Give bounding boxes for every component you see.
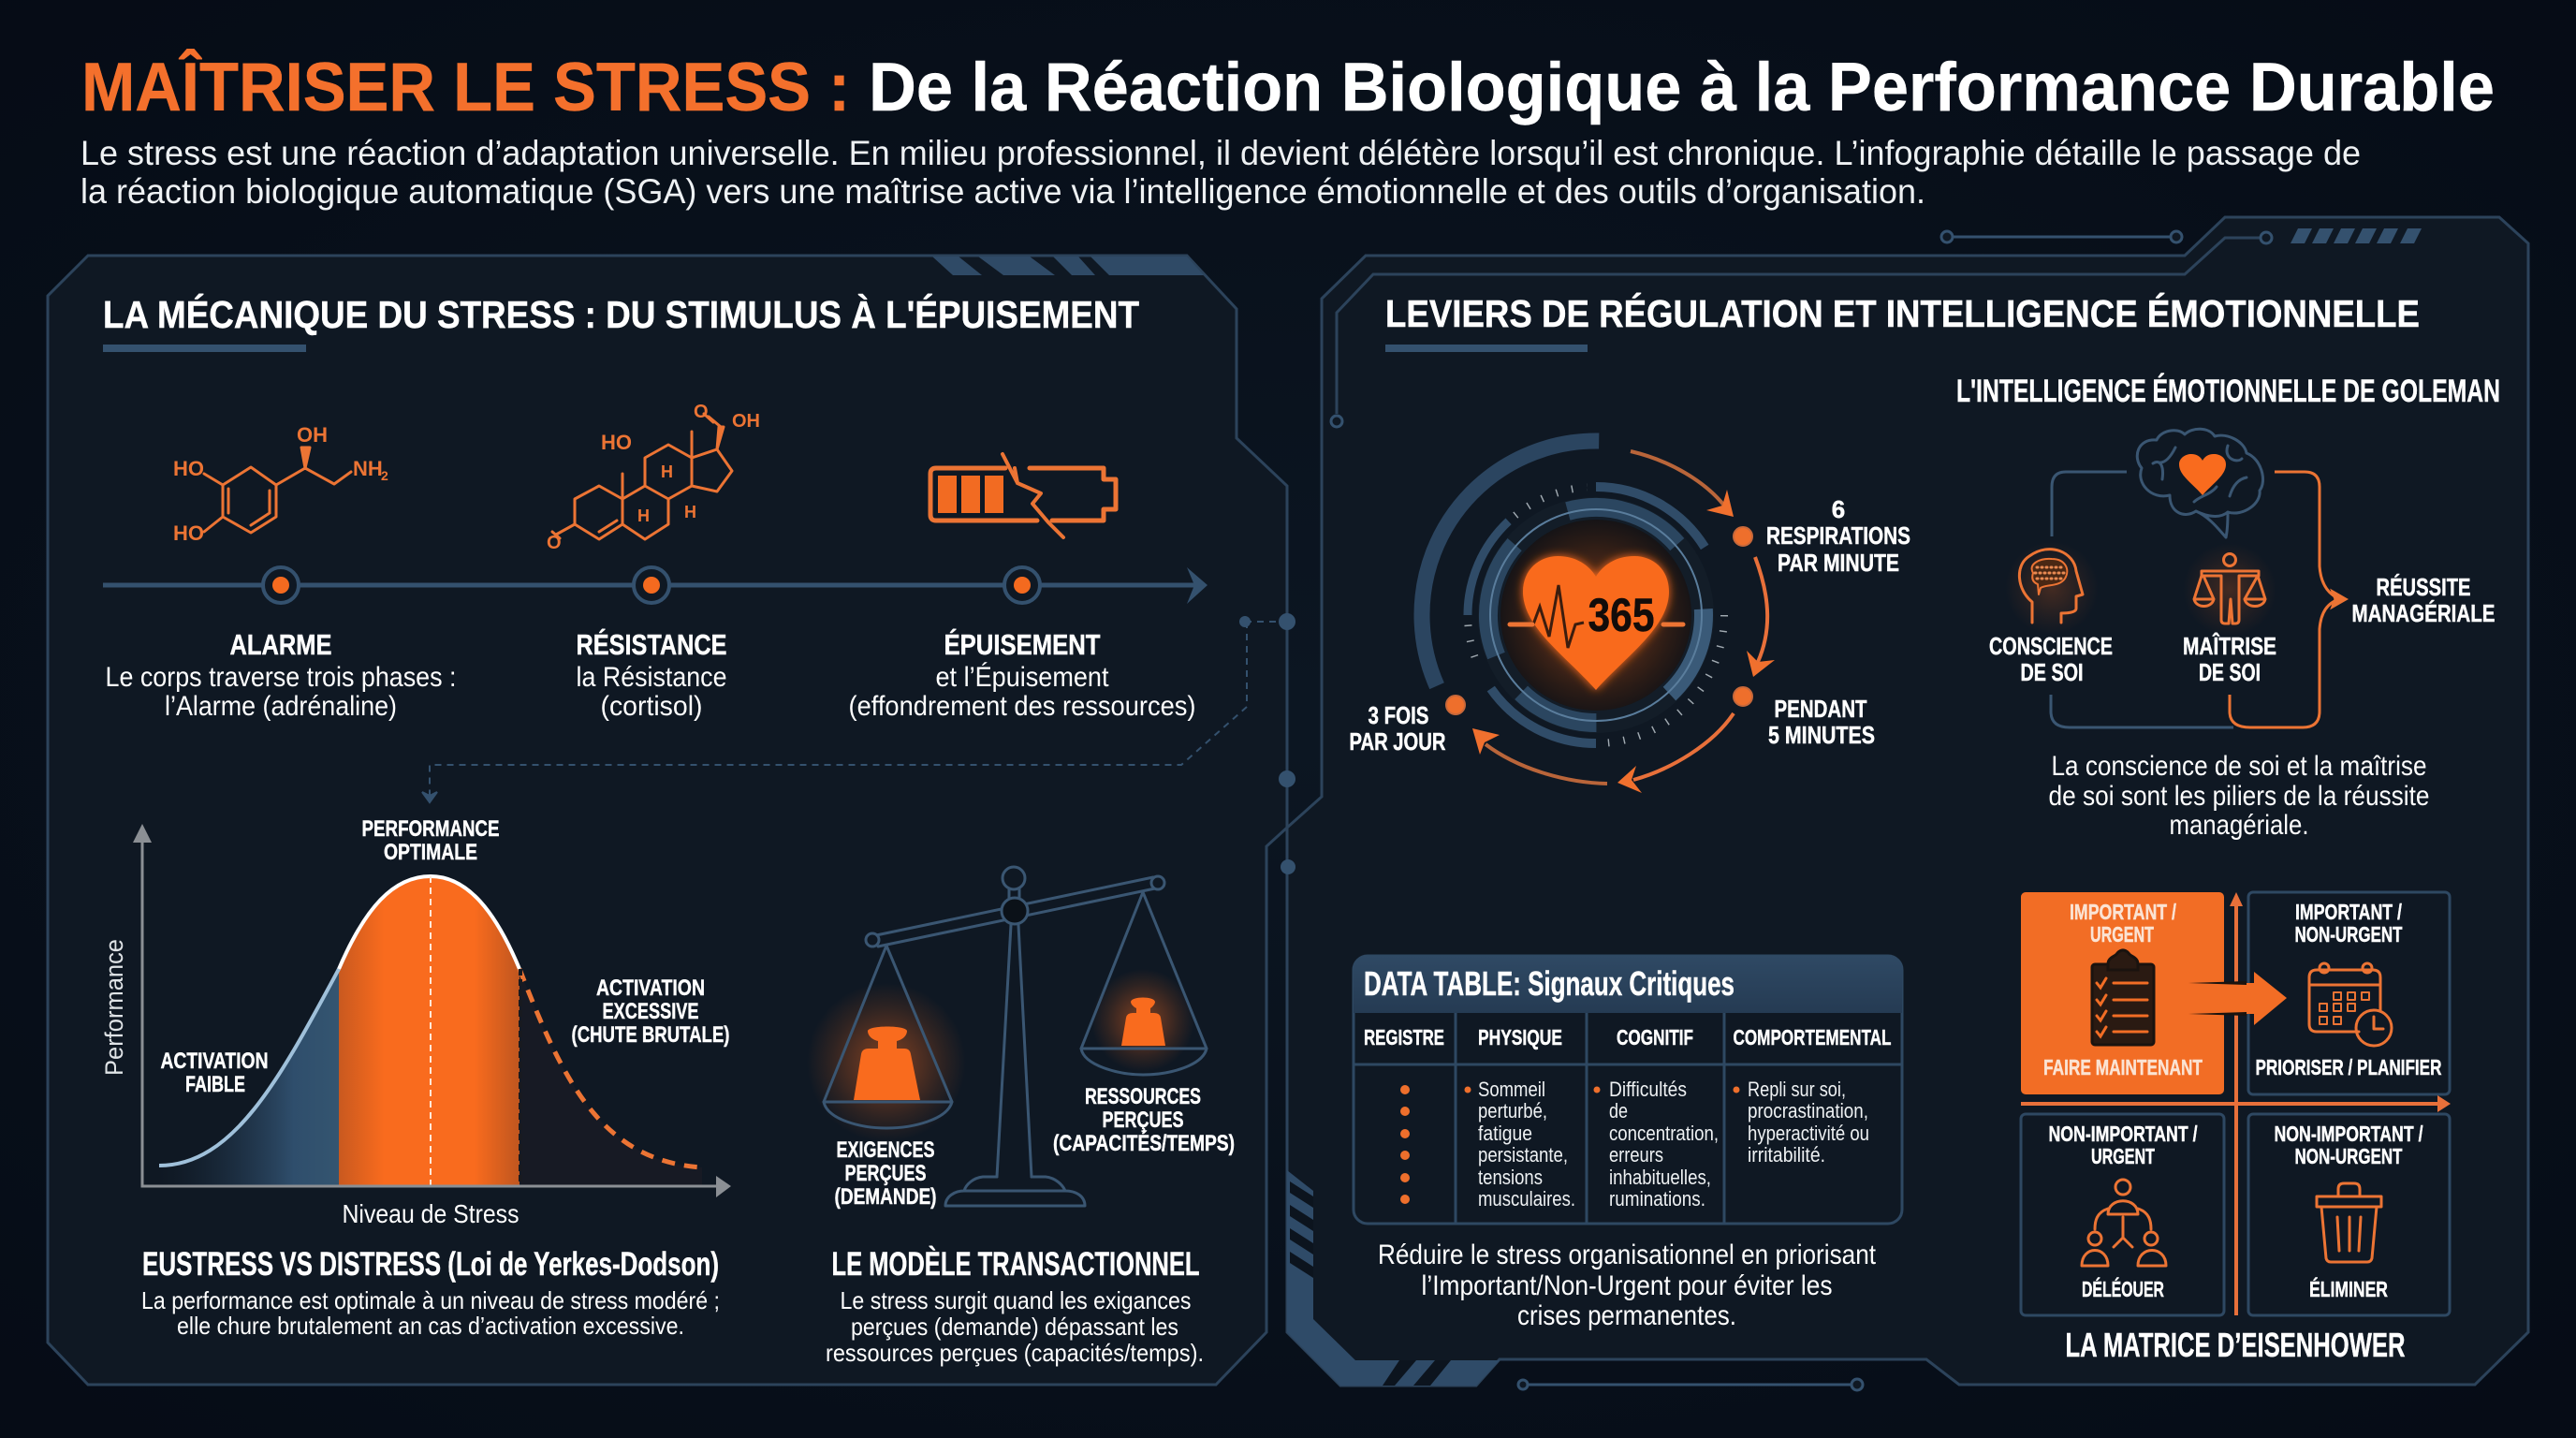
quadrant: éliminer: ÉLIMINER — [2309, 1276, 2388, 1301]
text: eustress vs distress: elle chure brutalement an cas d’activation excessive. — [177, 1312, 684, 1340]
table cell: comportemental: procrastination, — [1748, 1099, 1868, 1123]
quadrant: faire maintenant — [2021, 892, 2224, 1094]
quadrant: éliminer — [2248, 1114, 2450, 1315]
icon: cortisol molecule: OH — [732, 411, 760, 432]
cycle arrows — [1486, 451, 1767, 784]
label: 3 fois par jour: 3 FOIS — [1368, 701, 1428, 729]
label: performance optimale: OPTIMALE — [384, 840, 477, 865]
icon: balance scale — [807, 867, 1207, 1206]
quadrant: faire maintenant: URGENT — [2090, 922, 2154, 946]
text: résistance — [577, 628, 726, 722]
table cell: physique: musculaires. — [1478, 1187, 1575, 1211]
quadrant: prioriser planifier: IMPORTANT / — [2295, 900, 2402, 924]
label: activation excessive: EXCESSIVE — [603, 999, 698, 1024]
table column headers — [1364, 1025, 1891, 1049]
table cell: physique: persistante, — [1478, 1143, 1568, 1167]
quadrant: déléguer — [2021, 1114, 2224, 1315]
panel: leviers de régulation — [1281, 217, 2528, 1390]
table column headers: PHYSIQUE — [1478, 1025, 1562, 1049]
table cell: comportemental: irritabilité. — [1748, 1143, 1825, 1167]
text: eustress vs distress — [141, 1246, 720, 1340]
table cell: cognitif: concentration, — [1609, 1122, 1719, 1145]
table title: DATA TABLE: Signaux Critiques — [1364, 964, 1734, 1003]
text: réduire le stress: l’Important/Non-Urgent pour éviter les — [1421, 1270, 1833, 1301]
label: 6 respirations par minute: PAR MINUTE — [1778, 549, 1899, 577]
label: maîtrise de soi: MAÎTRISE — [2183, 632, 2276, 660]
subtitle text: la réaction biologique automatique (SGA) vers une maîtrise active via l’intelligence émotionnelle et des outils d’organisation. — [80, 172, 1925, 211]
text: alarme — [105, 628, 457, 722]
label: réussite managériale — [2351, 573, 2496, 627]
label: ressources perçues — [1053, 1084, 1235, 1156]
text: eustress vs distress: La performance est optimale à un niveau de stress modéré ; — [141, 1286, 720, 1314]
quadrant: déléguer: DÉLÉOUER — [2082, 1276, 2164, 1301]
quadrant: prioriser planifier: NON-URGENT — [2295, 922, 2402, 946]
label: activation excessive: (CHUTE BRUTALE) — [571, 1022, 730, 1048]
table column headers: COGNITIF — [1617, 1025, 1693, 1049]
text: Goleman summary: managériale. — [2170, 810, 2308, 841]
subtitle text — [80, 134, 2361, 211]
table column headers: REGISTRE — [1364, 1025, 1444, 1049]
label: réussite managériale: MANAGÉRIALE — [2351, 599, 2496, 627]
title — [81, 50, 2495, 125]
label: pendant 5 minutes: PENDANT — [1775, 695, 1867, 723]
label: exigences perçues: EXIGENCES — [837, 1137, 934, 1163]
table cell: cognitif — [1609, 1078, 1719, 1211]
text: réduire le stress — [1378, 1240, 1877, 1331]
panel heading: mécanique: LA MÉCANIQUE DU STRESS : DU STIMULUS À L'ÉPUISEMENT — [103, 293, 1139, 336]
text: épuisement: (effondrement des ressources) — [848, 691, 1196, 722]
icon: breathing dial with heart: 365 — [1588, 589, 1655, 641]
label: 3 fois par jour — [1350, 701, 1446, 756]
axis label: niveau de stress: Niveau de Stress — [343, 1199, 519, 1228]
table cell: cognitif: inhabituelles, — [1609, 1166, 1711, 1189]
title: De la Réaction Biologique à la Performance Durable — [869, 50, 2495, 125]
icon: head with brain — [2005, 541, 2099, 635]
table column headers: COMPORTEMENTAL — [1734, 1025, 1891, 1049]
quadrant: déléguer: URGENT — [2091, 1144, 2155, 1168]
icon: cortisol molecule: O — [547, 533, 562, 553]
text: eustress vs distress: EUSTRESS VS DISTRESS (Loi de Yerkes-Dodson) — [142, 1246, 719, 1283]
icon: cortisol molecule: O — [694, 402, 709, 422]
quadrant: prioriser planifier — [2248, 892, 2450, 1094]
label: activation faible: FAIBLE — [185, 1072, 245, 1097]
label: ressources perçues: (CAPACITÉS/TEMPS) — [1053, 1130, 1235, 1156]
table cell: cognitif: ruminations. — [1609, 1187, 1705, 1211]
label: exigences perçues — [835, 1137, 936, 1210]
icon: adrénaline molecule: NH — [353, 457, 383, 480]
label: performance optimale — [361, 816, 500, 865]
table: registre bullets — [1400, 1085, 1739, 1204]
table cell: cognitif: erreurs — [1609, 1143, 1663, 1167]
label: activation excessive: ACTIVATION — [596, 976, 705, 1001]
table cell: cognitif: Difficultés — [1609, 1078, 1687, 1101]
chart: Yerkes-Dodson curve — [100, 816, 731, 1228]
title: MAÎTRISER LE STRESS : — [81, 50, 850, 125]
text: modèle transactionnel — [826, 1245, 1204, 1367]
icon: adrénaline molecule: HO — [173, 457, 204, 480]
icon: adrénaline molecule: HO — [173, 521, 204, 545]
connector: dashed link to chart — [422, 614, 1295, 802]
panel: mécanique du stress — [48, 256, 1295, 1385]
label: 6 respirations par minute — [1766, 495, 1910, 577]
text: modèle transactionnel: Le stress surgit quand les exigances — [841, 1286, 1191, 1314]
icon: clipboard — [2092, 950, 2154, 1045]
icon: cortisol molecule: H — [684, 503, 696, 521]
quadrant: prioriser planifier: PRIORISER / PLANIFIER — [2256, 1055, 2442, 1079]
matrix axes — [2021, 892, 2451, 1315]
label: activation excessive — [571, 976, 730, 1048]
icon: cortisol molecule: H — [661, 462, 673, 481]
icon: cortisol molecule: HO — [601, 431, 632, 454]
text: résistance: (cortisol) — [601, 691, 702, 722]
table cell: cognitif: de — [1609, 1099, 1628, 1123]
table cell: physique: fatigue — [1478, 1122, 1532, 1145]
label: exigences perçues: PERÇUES — [844, 1161, 927, 1186]
label: 3 fois par jour: PAR JOUR — [1350, 727, 1446, 756]
label: performance optimale: PERFORMANCE — [361, 816, 500, 842]
label: ressources perçues: PERÇUES — [1103, 1108, 1183, 1133]
table cell: physique: perturbé, — [1478, 1099, 1547, 1123]
text: alarme: Le corps traverse trois phases : — [105, 662, 457, 693]
label: maîtrise de soi — [2183, 632, 2276, 686]
text: Goleman summary: de soi sont les piliers de la réussite — [2048, 781, 2430, 812]
icon: brain with heart — [2137, 429, 2263, 537]
diagram: Goleman connectors — [2051, 472, 2346, 727]
panel heading: leviers: LEVIERS DE RÉGULATION ET INTELLIGENCE ÉMOTIONNELLE — [1385, 292, 2420, 335]
text: modèle transactionnel: ressources perçues (capacités/temps). — [826, 1339, 1204, 1367]
text: résistance: la Résistance — [577, 662, 726, 693]
matrix: Eisenhower — [2021, 892, 2451, 1315]
table cell: physique: Sommeil — [1478, 1078, 1545, 1101]
table cell: comportemental: hyperactivité ou — [1748, 1122, 1869, 1145]
icon: trash can — [2317, 1183, 2381, 1262]
text: modèle transactionnel: perçues (demande) dépassant les — [851, 1313, 1178, 1341]
text: épuisement: et l’Épuisement — [936, 662, 1109, 693]
icon: calendar — [2309, 963, 2392, 1046]
text: réduire le stress: Réduire le stress organisationnel en priorisant — [1378, 1240, 1877, 1270]
label: ressources perçues: RESSOURCES — [1085, 1084, 1201, 1109]
label: conscience de soi: DE SOI — [2020, 658, 2084, 686]
label: exigences perçues: (DEMANDE) — [835, 1184, 936, 1210]
label: réussite managériale: RÉUSSITE — [2376, 573, 2471, 601]
icon: org chart — [2082, 1180, 2166, 1266]
text: réduire le stress: crises permanentes. — [1517, 1300, 1736, 1331]
text: résistance: RÉSISTANCE — [577, 628, 726, 661]
icon: adrénaline molecule: 2 — [381, 468, 388, 483]
label: 6 respirations par minute: RESPIRATIONS — [1766, 521, 1910, 550]
label: pendant 5 minutes — [1768, 695, 1875, 749]
table cell: comportemental — [1748, 1078, 1869, 1167]
table cell: physique — [1478, 1078, 1575, 1211]
label: conscience de soi — [1989, 632, 2113, 686]
label: pendant 5 minutes: 5 MINUTES — [1768, 721, 1875, 749]
label: conscience de soi: CONSCIENCE — [1989, 632, 2113, 660]
icon: breathing dial with heart — [1413, 433, 1775, 793]
icon: cortisol molecule — [547, 402, 760, 553]
icon: person with scales — [2183, 543, 2276, 637]
table cell: physique: tensions — [1478, 1166, 1543, 1189]
data table: signaux critiques — [1354, 956, 1902, 1224]
text: alarme: l’Alarme (adrénaline) — [165, 691, 397, 722]
label: activation faible — [161, 1049, 268, 1097]
quadrant: éliminer: NON-IMPORTANT / — [2275, 1122, 2423, 1146]
icon: adrénaline molecule: OH — [297, 423, 328, 447]
text: alarme: ALARME — [230, 628, 331, 661]
text: Goleman summary: La conscience de soi et la maîtrise — [2052, 751, 2426, 782]
quadrant: faire maintenant: IMPORTANT / — [2070, 900, 2176, 924]
quadrant: déléguer: NON-IMPORTANT / — [2048, 1122, 2198, 1146]
heading: matrice d'Eisenhower: LA MATRICE D’EISENHOWER — [2065, 1326, 2406, 1364]
quadrant: faire maintenant: FAIRE MAINTENANT — [2043, 1055, 2203, 1079]
icon: adrénaline molecule — [173, 423, 388, 545]
label: maîtrise de soi: DE SOI — [2199, 658, 2261, 686]
arrow: urgent to planifier — [2188, 972, 2287, 1025]
text: Goleman summary — [2048, 751, 2430, 841]
icon: cortisol molecule: H — [637, 506, 650, 525]
icon: broken battery — [930, 454, 1116, 537]
quadrant: éliminer: NON-URGENT — [2295, 1144, 2402, 1168]
timeline — [103, 567, 1208, 604]
label: activation faible: ACTIVATION — [161, 1049, 268, 1074]
text: épuisement — [848, 628, 1196, 722]
label: 6 respirations par minute: 6 — [1832, 495, 1845, 523]
text: modèle transactionnel: LE MODÈLE TRANSACTIONNEL — [831, 1245, 1200, 1283]
subtitle text: Le stress est une réaction d’adaptation universelle. En milieu professionnel, il devient délétère lorsqu’il est chronique. L’infographie détaille le passage de — [80, 134, 2361, 172]
text: épuisement: ÉPUISEMENT — [944, 628, 1101, 661]
axis label: performance: Performance — [100, 939, 128, 1076]
table cell: comportemental: Repli sur soi, — [1748, 1078, 1846, 1101]
